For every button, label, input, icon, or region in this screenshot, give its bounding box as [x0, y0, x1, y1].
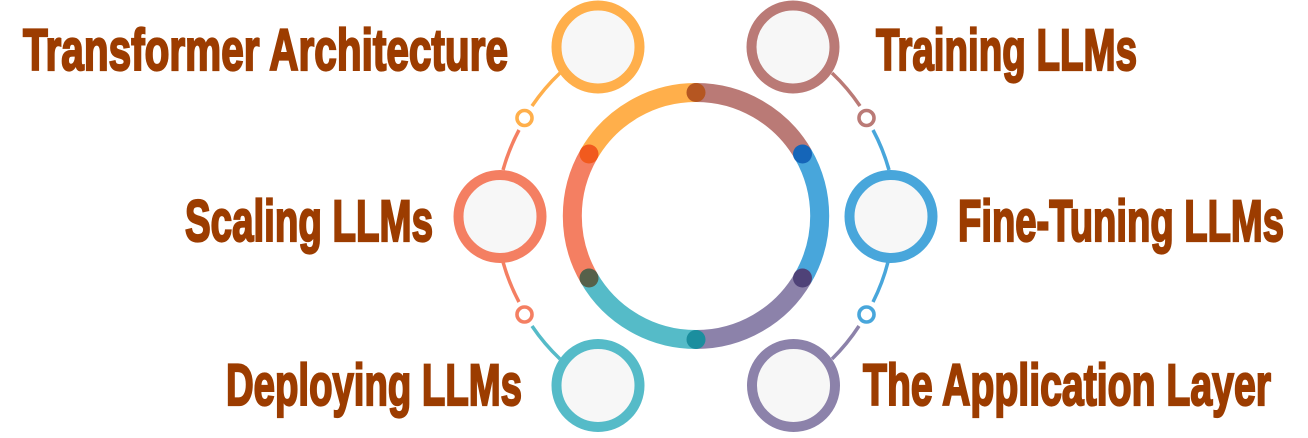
- node: upper left: [517, 110, 532, 126]
- arc: fine-tuning upper: [873, 130, 889, 170]
- label: Deploying LLMs: Deploying LLMs: [226, 353, 522, 418]
- circle: deploying: [556, 344, 640, 427]
- node: upper right: [859, 110, 874, 126]
- arc: deploying: [532, 326, 560, 359]
- ring segment: application layer: [696, 278, 803, 340]
- ring segment: training: [696, 92, 803, 154]
- circle: scaling: [458, 175, 542, 258]
- label: Transformer Architecture: Transformer Architecture: [23, 18, 508, 83]
- circle: transformer architecture: [556, 6, 640, 88]
- small connector nodes: [517, 110, 874, 322]
- circle: training: [752, 6, 834, 88]
- icon circles: [458, 6, 932, 427]
- dot: upper right: [793, 144, 812, 164]
- circle: application layer: [752, 344, 835, 427]
- dot: bottom: [686, 330, 706, 349]
- dot: lower right: [793, 268, 812, 288]
- ring junction dots: [580, 83, 812, 349]
- central ring: [572, 92, 820, 340]
- label: Scaling LLMs: Scaling LLMs: [185, 189, 433, 254]
- node: lower right: [859, 307, 874, 322]
- arc: transformer architecture: [532, 73, 560, 106]
- dot: lower left: [580, 268, 598, 288]
- connector arcs: [503, 73, 889, 359]
- arc: training: [832, 73, 860, 106]
- ring segment: transformer architecture: [589, 92, 696, 154]
- dot: top: [686, 83, 706, 102]
- circle: fine-tuning: [850, 175, 932, 258]
- node: lower left: [517, 307, 532, 322]
- ring segment: deploying: [589, 278, 696, 340]
- arc: scaling lower: [503, 262, 519, 302]
- arc: fine-tuning lower: [873, 262, 888, 302]
- label: Training LLMs: Training LLMs: [876, 18, 1137, 83]
- arc: scaling upper: [503, 130, 519, 170]
- ring segment: fine-tuning: [803, 154, 820, 278]
- dot: upper left: [580, 144, 598, 164]
- arc: application layer: [832, 326, 859, 359]
- ring segment: scaling: [572, 154, 589, 278]
